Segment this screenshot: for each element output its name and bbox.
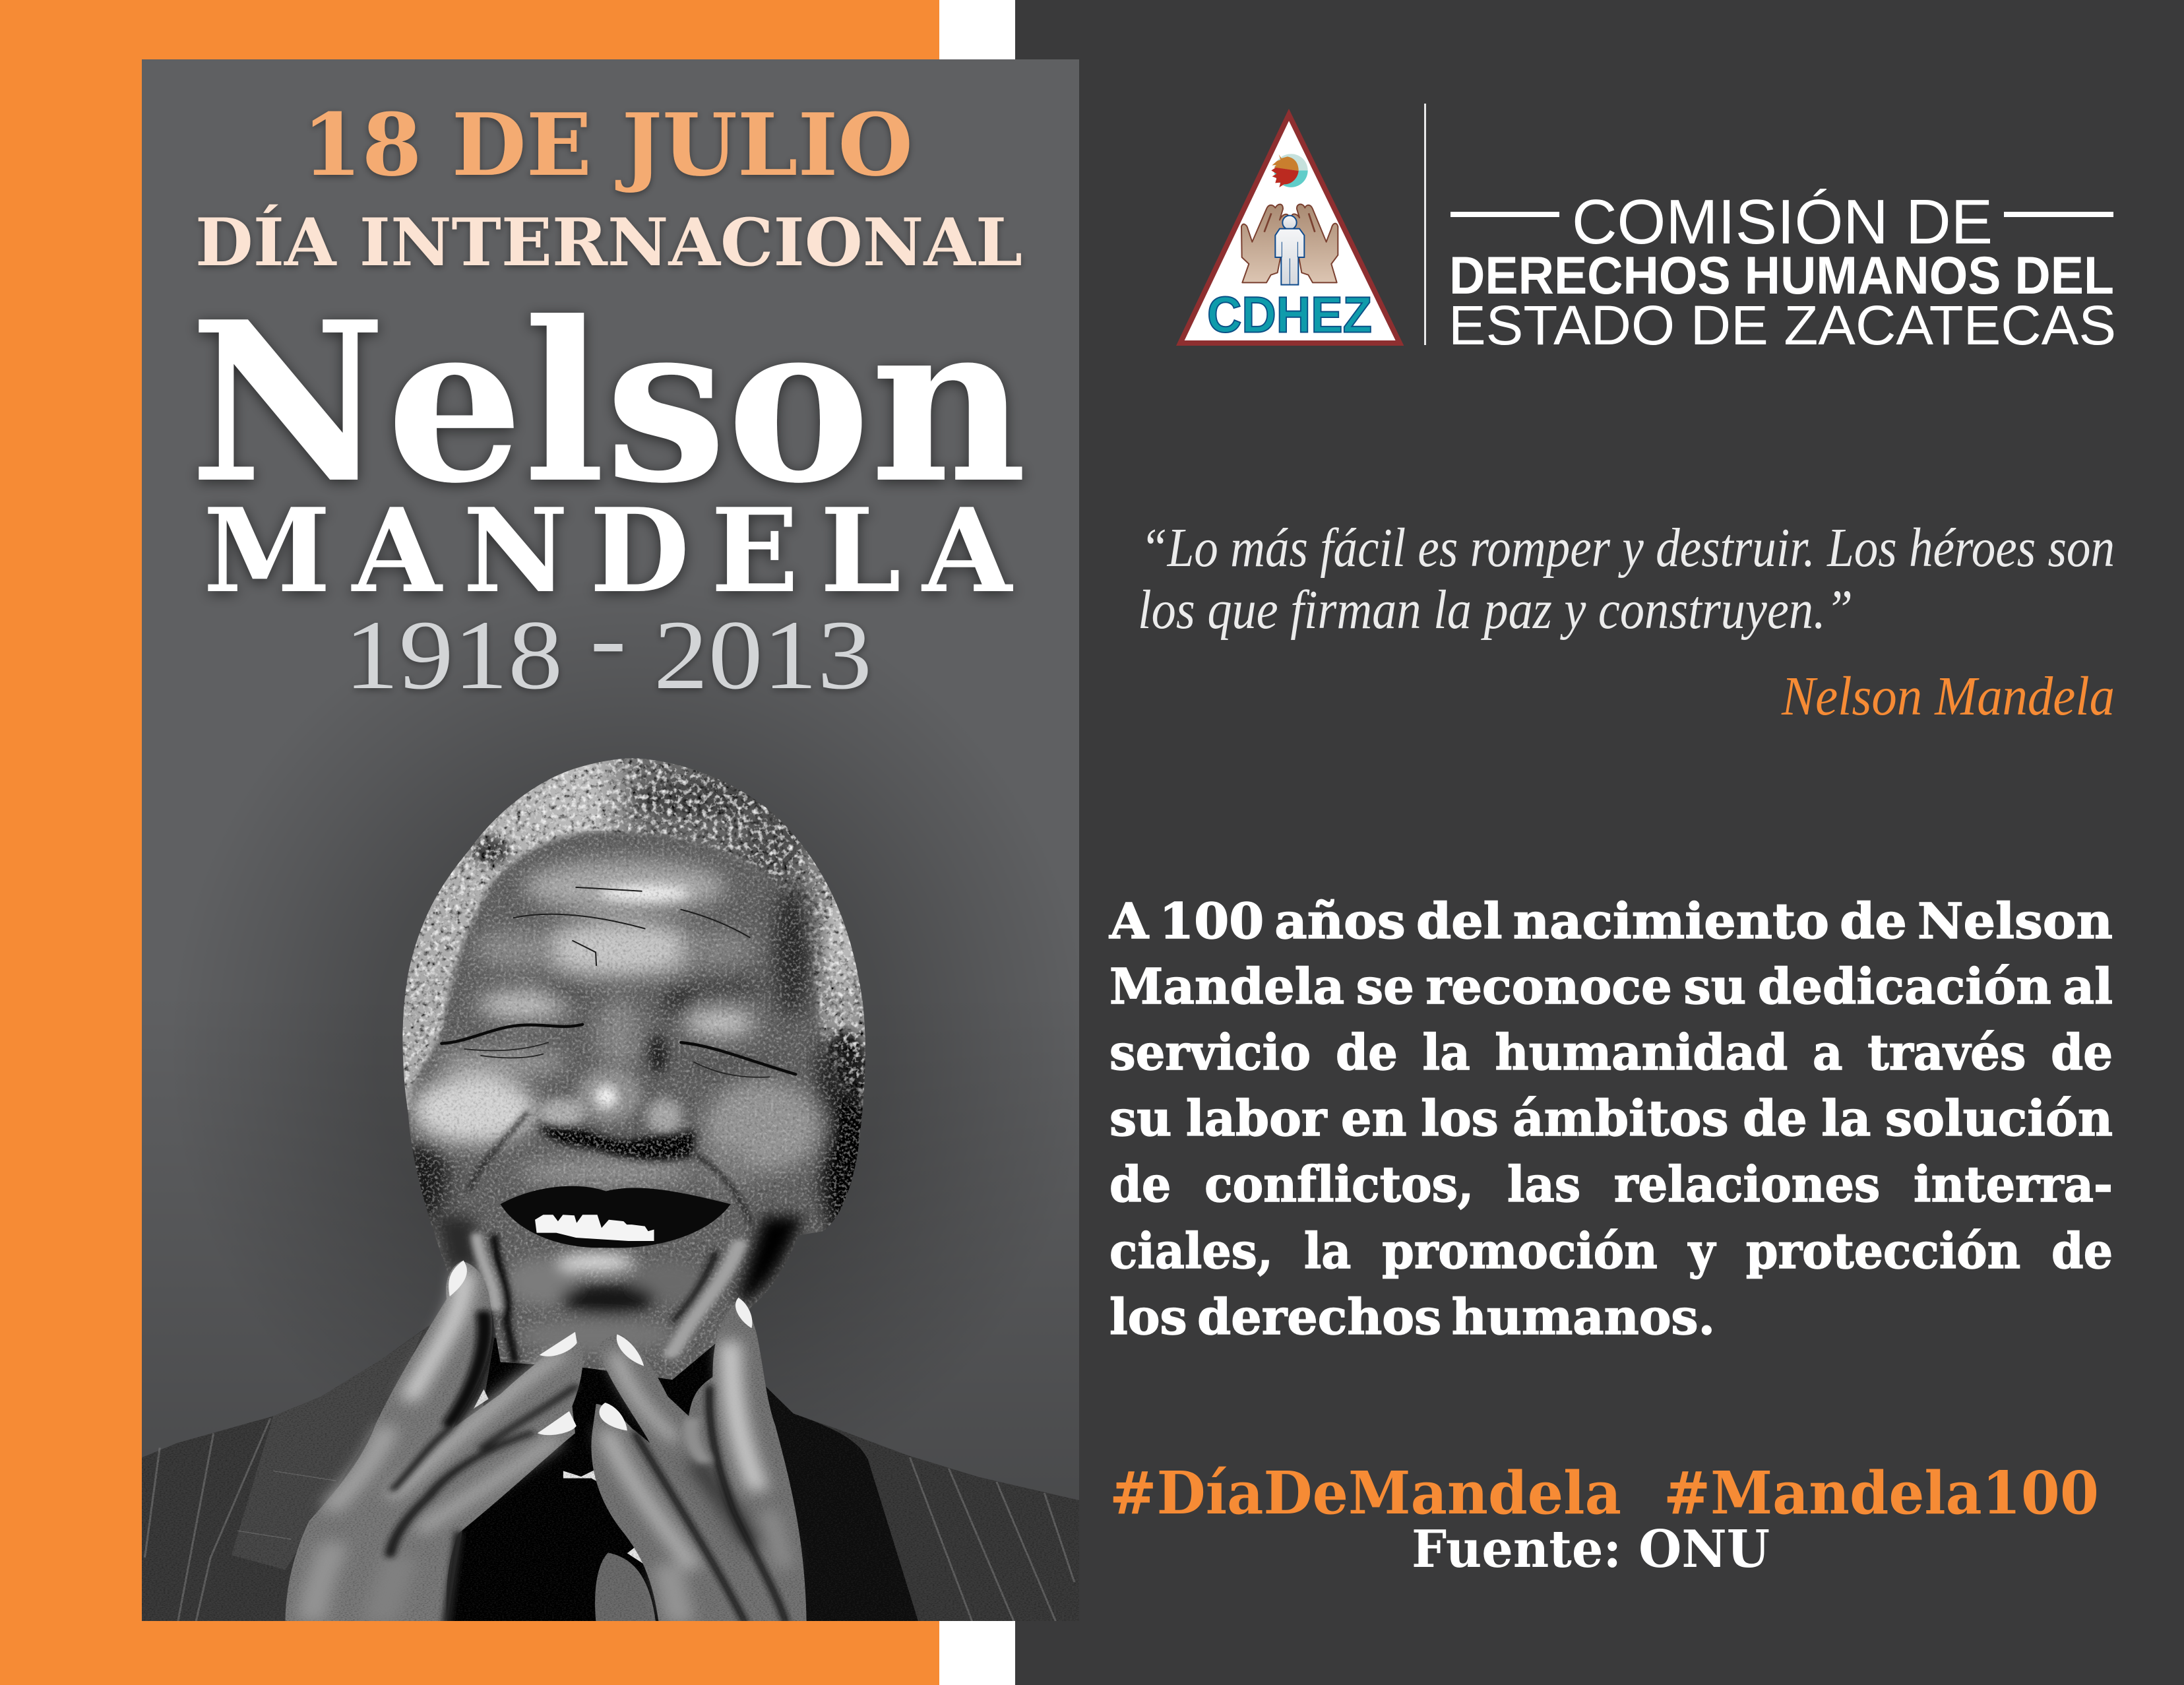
title: years: - bbox=[590, 583, 627, 693]
organization line 3: ESTADO DE ZACATECAS bbox=[1449, 294, 2116, 356]
hashtag: DíaDeMandela: #DíaDeMandela bbox=[1109, 1458, 1621, 1527]
title: Nelson: Nelson bbox=[189, 273, 1027, 532]
hair bbox=[389, 749, 875, 1110]
chin and jaw bbox=[435, 1216, 805, 1362]
title: Mandela: MANDELA bbox=[203, 484, 1013, 619]
quote author: Nelson Mandela bbox=[1781, 666, 2115, 727]
body line 2: Mandela se reconoce su dedicación al bbox=[1109, 959, 2113, 1015]
title: years: 2013 bbox=[627, 600, 872, 710]
portrait of Nelson Mandela bbox=[142, 666, 1079, 1621]
right dark lapel bbox=[763, 1384, 919, 1624]
hashtag: Mandela100: #Mandela100 bbox=[1664, 1458, 2099, 1527]
dark right background bbox=[1015, 0, 2184, 1685]
logo person bbox=[1275, 216, 1304, 285]
organization line 1: COMISIÓN DE bbox=[1572, 187, 1993, 257]
closed eyes and wrinkles bbox=[441, 887, 796, 1077]
smile folds bbox=[476, 1236, 739, 1362]
cheek creases bbox=[470, 1113, 750, 1221]
source: Fuente: ONU bbox=[1412, 1519, 1770, 1579]
right rule bbox=[2004, 212, 2113, 217]
hands bbox=[285, 1260, 807, 1624]
logo CDHEZ wordmark: CDHEZ bbox=[1207, 286, 1372, 343]
lower thumb bbox=[595, 1552, 656, 1624]
orange background band bbox=[0, 0, 939, 1685]
shirt bbox=[448, 1338, 715, 1621]
smiling mouth bbox=[501, 1186, 731, 1248]
facial skin tones bbox=[402, 831, 875, 1395]
face and hair bbox=[389, 749, 881, 1397]
body line 3: servicio de la humanidad a través de bbox=[1109, 1025, 2113, 1081]
finger nails bbox=[449, 1260, 752, 1435]
body text bbox=[1109, 893, 2113, 1346]
icon: CDHEZ logo bbox=[1180, 115, 1400, 343]
panel: gray poster with title and portrait bbox=[142, 59, 1092, 1624]
logo triangle bbox=[1180, 115, 1400, 343]
title: years: 1918 bbox=[344, 600, 542, 710]
body line 1: A 100 años del nacimiento de Nelson bbox=[1109, 893, 2113, 950]
left rule bbox=[1451, 212, 1559, 217]
left lapel bbox=[232, 1331, 423, 1570]
suit and shirt bbox=[142, 1325, 1079, 1624]
white collar glimpses bbox=[474, 1389, 645, 1565]
suit jacket bbox=[142, 1325, 1079, 1624]
body line 4: su labor en los ámbitos de la solución bbox=[1109, 1091, 2113, 1147]
teeth bbox=[535, 1215, 654, 1241]
quote line 2: los que firman la paz y construyen.” bbox=[1138, 579, 1853, 641]
left hand bbox=[285, 1261, 583, 1624]
pin stripes bbox=[145, 1418, 1075, 1623]
organization line 2: DERECHOS HUMANOS DEL bbox=[1449, 246, 2114, 305]
body line 5: de conflictos, las relaciones interra- bbox=[1109, 1157, 2113, 1213]
divider between logo and organization name bbox=[1424, 104, 1426, 345]
right hand bbox=[591, 1299, 807, 1624]
body line 6: ciales, la promoción y protección de bbox=[1109, 1223, 2113, 1280]
logo hands bbox=[1241, 205, 1338, 282]
logo sun bbox=[1271, 154, 1308, 187]
heading: organization name bbox=[1449, 187, 2116, 356]
quote bbox=[1138, 517, 2115, 641]
body line 7: los derechos humanos. bbox=[1109, 1289, 1715, 1346]
title: date: 18 DE JULIO bbox=[302, 94, 913, 195]
white stripe bbox=[939, 0, 1015, 1685]
title: international day: DÍA INTERNACIONAL bbox=[195, 205, 1022, 281]
shadow under nose bbox=[538, 1123, 696, 1160]
portrait shadow glow bbox=[142, 666, 1079, 1500]
